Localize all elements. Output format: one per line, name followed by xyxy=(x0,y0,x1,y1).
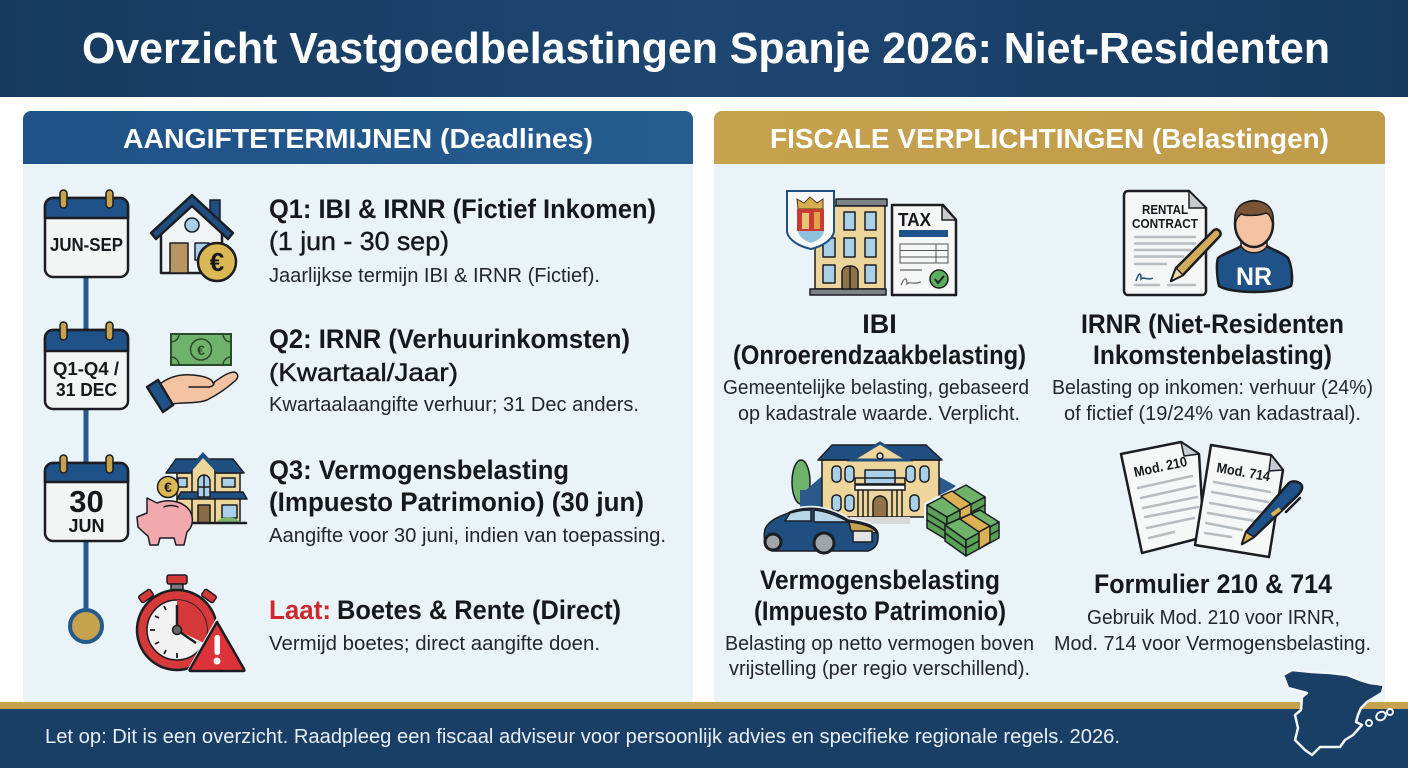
icon: calendar 30 jun xyxy=(45,455,128,541)
text: Formulier 210 & 714 xyxy=(1054,569,1371,655)
icon: stopwatch with warning xyxy=(137,575,249,674)
text: Formulier 210 & 714: Mod. 714 voor Vermogensbelasting. xyxy=(1054,633,1371,655)
text: Q1: Q1: IBI & IRNR (Fictief Inkomen) xyxy=(269,194,656,224)
text: Vermogensbelasting: Belasting op netto vermogen boven xyxy=(725,633,1034,655)
text: Formulier 210 & 714: Formulier 210 & 714 xyxy=(1094,569,1332,599)
text: IRNR: of fictief (19/24% van kadastraal). xyxy=(1064,403,1361,425)
text: late filing xyxy=(269,595,621,655)
icon: calendar q1-q4 xyxy=(45,322,128,409)
icon: calendar 30 jun: JUN xyxy=(68,516,105,536)
text: IRNR xyxy=(1052,309,1373,425)
panel heading: deadlines xyxy=(23,111,693,164)
text: IBI: op kadastrale waarde. Verplicht. xyxy=(738,403,1020,425)
text: Q2: Q2: IRNR (Verhuurinkomsten) xyxy=(269,324,630,354)
header banner xyxy=(0,0,1408,97)
text: Q3: (Impuesto Patrimonio) (30 jun) xyxy=(269,487,644,517)
text: IBI: (Onroerendzaakbelasting) xyxy=(733,340,1026,370)
text: late filing: Vermijd boetes; direct aangifte doen. xyxy=(269,633,600,655)
text: Q1: Jaarlijkse termijn IBI & IRNR (Fictief). xyxy=(269,265,600,287)
icon: Mod. 210 and Mod. 714 forms with pen: Mod. 210 xyxy=(1132,453,1189,480)
icon: gold timeline end dot xyxy=(70,610,102,642)
text: Q2: (Kwartaal/Jaar) xyxy=(269,359,458,387)
icon: piggy bank and house xyxy=(137,455,247,545)
text: late filing: Boetes & Rente (Direct) xyxy=(337,595,621,625)
icon: map of Spain xyxy=(1283,670,1393,755)
panel heading: belastingen xyxy=(714,111,1385,164)
text: Vermogensbelasting xyxy=(725,565,1034,680)
text: Vermogensbelasting: vrijstelling (per regio verschillend). xyxy=(729,658,1030,680)
icon: town hall, shield and tax form xyxy=(787,191,956,295)
text: Q3 xyxy=(269,455,666,547)
panel: aangiftetermijnen xyxy=(23,111,693,706)
text: Q2: Kwartaalaangifte verhuur; 31 Dec anders. xyxy=(269,394,639,416)
text: Q2 xyxy=(269,324,639,416)
icon: house with euro coin: € xyxy=(210,247,224,277)
text: Q1 xyxy=(269,194,656,287)
icon: hand holding banknote xyxy=(147,334,238,412)
icon: calendar q1-q4: Q1-Q4 / xyxy=(53,359,119,379)
icon: calendar jun-sep: JUN-SEP xyxy=(50,235,123,255)
icon: town hall, shield and tax form: TAX xyxy=(898,210,931,230)
icon: Mod. 210 and Mod. 714 forms with pen: Mod. 714 xyxy=(1215,459,1272,484)
icon: rental contract and NR person: NR xyxy=(1236,263,1272,291)
text: Q3: Q3: Vermogensbelasting xyxy=(269,455,569,485)
text: IRNR: IRNR (Niet-Residenten xyxy=(1081,309,1344,339)
icon: Mod. 210 and Mod. 714 forms with pen xyxy=(1121,442,1302,557)
panel heading: deadlines: AANGIFTETERMIJNEN (Deadlines) xyxy=(123,123,593,154)
icon: house with euro coin xyxy=(151,195,236,281)
text: IBI: Gemeentelijke belasting, gebaseerd xyxy=(723,377,1029,399)
text: Q3: Aangifte voor 30 juni, indien van toepassing. xyxy=(269,525,666,547)
panel: fiscale verplichtingen xyxy=(714,111,1385,706)
footer note: Let op: Dit is een overzicht. Raadpleeg een fiscaal adviseur voor persoonlijk advies en specifieke regionale regels. 2026. xyxy=(45,726,1120,748)
icon: rental contract and NR person xyxy=(1124,191,1292,295)
icon: villa, car and money stacks xyxy=(764,443,999,556)
text: IBI: IBI xyxy=(862,309,897,339)
text: IBI xyxy=(723,309,1029,425)
text: late filing: Laat: xyxy=(269,595,331,625)
text: Vermogensbelasting: (Impuesto Patrimonio) xyxy=(754,596,1006,626)
icon: hand holding banknote: € xyxy=(197,342,205,358)
timeline line xyxy=(84,275,88,613)
text: IRNR: Belasting op inkomen: verhuur (24%) xyxy=(1052,377,1373,399)
title: Overzicht Vastgoedbelastingen Spanje 2026: Niet-Residenten xyxy=(82,24,1330,73)
icon: calendar q1-q4: 31 DEC xyxy=(56,380,117,400)
icon: calendar jun-sep xyxy=(45,190,128,277)
text: Formulier 210 & 714: Gebruik Mod. 210 voor IRNR, xyxy=(1087,607,1340,629)
text: Vermogensbelasting: Vermogensbelasting xyxy=(760,565,1000,595)
icon: rental contract and NR person: RENTAL xyxy=(1142,203,1188,217)
icon: calendar 30 jun: 30 xyxy=(69,484,104,519)
footer bar xyxy=(0,702,1408,768)
text: Q1: (1 jun - 30 sep) xyxy=(269,226,449,256)
icon: piggy bank and house: € xyxy=(164,479,172,495)
icon: rental contract and NR person: CONTRACT xyxy=(1132,217,1198,231)
text: IRNR: Inkomstenbelasting) xyxy=(1093,340,1332,370)
panel heading: belastingen: FISCALE VERPLICHTINGEN (Belastingen) xyxy=(770,123,1329,154)
